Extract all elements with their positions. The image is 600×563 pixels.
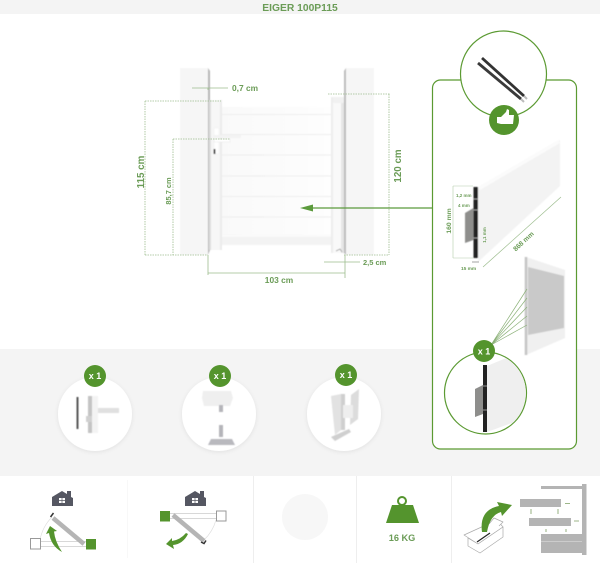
label: 115 cm: 115 cm [136, 155, 147, 188]
icon: screws circle [460, 31, 546, 117]
label: 120 cm: 120 cm [393, 149, 404, 183]
icon: packaging [464, 484, 586, 555]
badge: x 1 [473, 340, 495, 362]
right pillar [344, 68, 374, 255]
label: 160 mm: 160 mm [446, 208, 453, 234]
badge: x 1: x 1 [478, 346, 490, 356]
icon: house [52, 491, 73, 506]
label: 0,7 cm: 0,7 cm [232, 83, 258, 93]
accessories [58, 364, 381, 451]
lock stile and handle [209, 100, 241, 250]
hinge stile [331, 97, 344, 253]
icon: box [464, 518, 503, 553]
arrow: unpack [482, 502, 512, 532]
pointer lines [491, 289, 527, 345]
gate drawing [180, 68, 374, 255]
badge: x 1: x 1 [340, 370, 352, 380]
dimension lines [145, 88, 390, 278]
circle: clip detail [444, 352, 530, 434]
accessory: lock [58, 365, 132, 451]
colour swatch [282, 494, 328, 540]
badge: x 1: x 1 [89, 371, 101, 381]
dimension labels [136, 83, 404, 285]
accessory: stop [182, 365, 256, 451]
accessory: latch bracket [307, 364, 381, 451]
icon: thumbs up badge [489, 105, 519, 135]
icon: house [185, 491, 206, 506]
label: 4 mm: 4 mm [458, 203, 470, 208]
icon: opening outward [160, 491, 226, 549]
label: 1,1 mm: 1,1 mm [482, 227, 487, 243]
label: 1,2 mm: 1,2 mm [456, 193, 472, 198]
panel: slat detail [432, 31, 576, 449]
small gate side view [526, 257, 565, 355]
label: 103 cm: 103 cm [265, 275, 293, 285]
label: 868 mm: 868 mm [512, 231, 536, 253]
left pillar [180, 68, 210, 255]
stacked packaging diagram [520, 484, 586, 555]
icon: weight 16 KG [386, 497, 419, 543]
slat illustration [465, 140, 560, 262]
title: EIGER 100P115 [262, 3, 338, 14]
badge: x 1: x 1 [214, 371, 226, 381]
arrow: gate to panel detail [300, 204, 432, 212]
label: 2,5 cm: 2,5 cm [363, 258, 387, 267]
gate panel [222, 107, 332, 245]
label: 85,7 cm: 85,7 cm [164, 177, 173, 205]
label: 15 mm: 15 mm [461, 266, 476, 272]
label: weight: 16 KG [389, 533, 415, 543]
footer dividers [128, 476, 452, 563]
slat dimensions [446, 186, 561, 272]
icon: opening inward [30, 491, 96, 552]
